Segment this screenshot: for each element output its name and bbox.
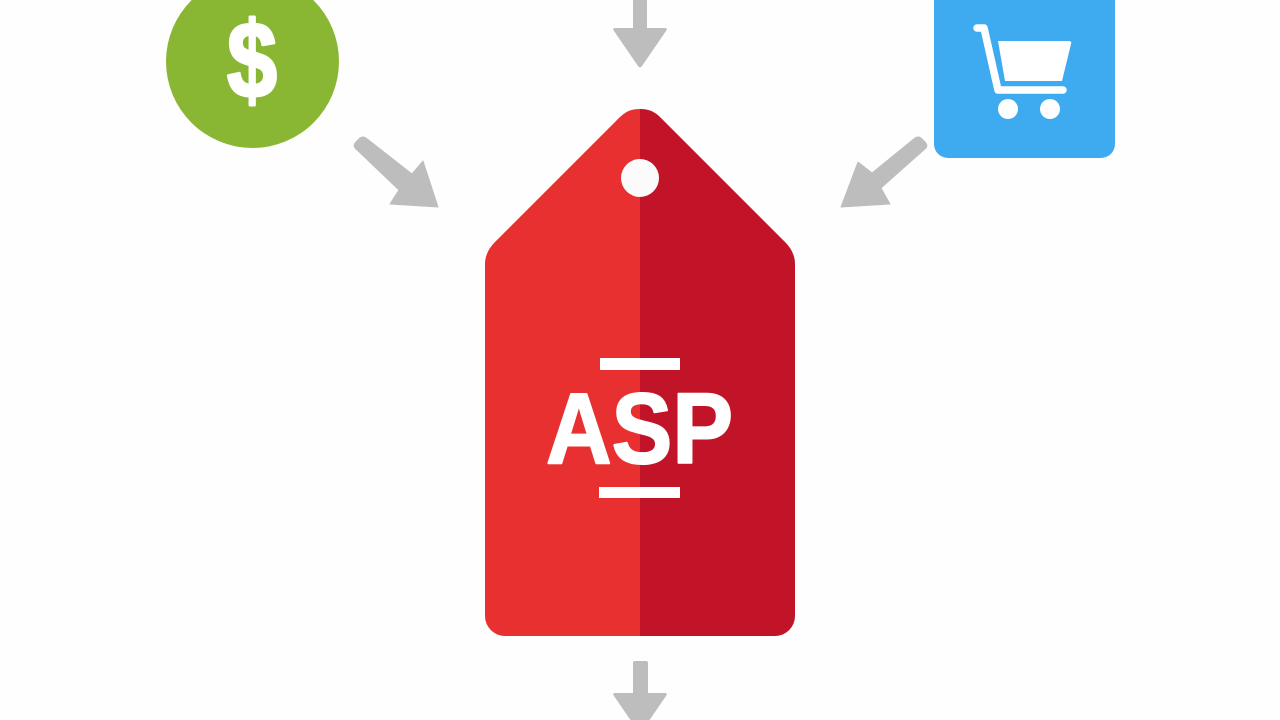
label: ASP: ASP [546, 373, 733, 485]
arrow: top centre pointing down [613, 0, 667, 68]
arrow: from cart to tag [841, 137, 927, 207]
price tag [485, 109, 795, 636]
tag right half [640, 109, 795, 636]
arrow: bottom centre pointing down [613, 661, 667, 720]
icon: green dollar circle: $ [227, 0, 277, 120]
icon: blue shopping cart square [934, 0, 1115, 158]
tag hole [621, 159, 659, 197]
arrow: from dollar circle to tag [354, 137, 438, 207]
bottom bar [599, 487, 680, 498]
tag left half [485, 109, 640, 636]
icon: green dollar circle [166, 0, 339, 148]
top bar [600, 358, 680, 370]
